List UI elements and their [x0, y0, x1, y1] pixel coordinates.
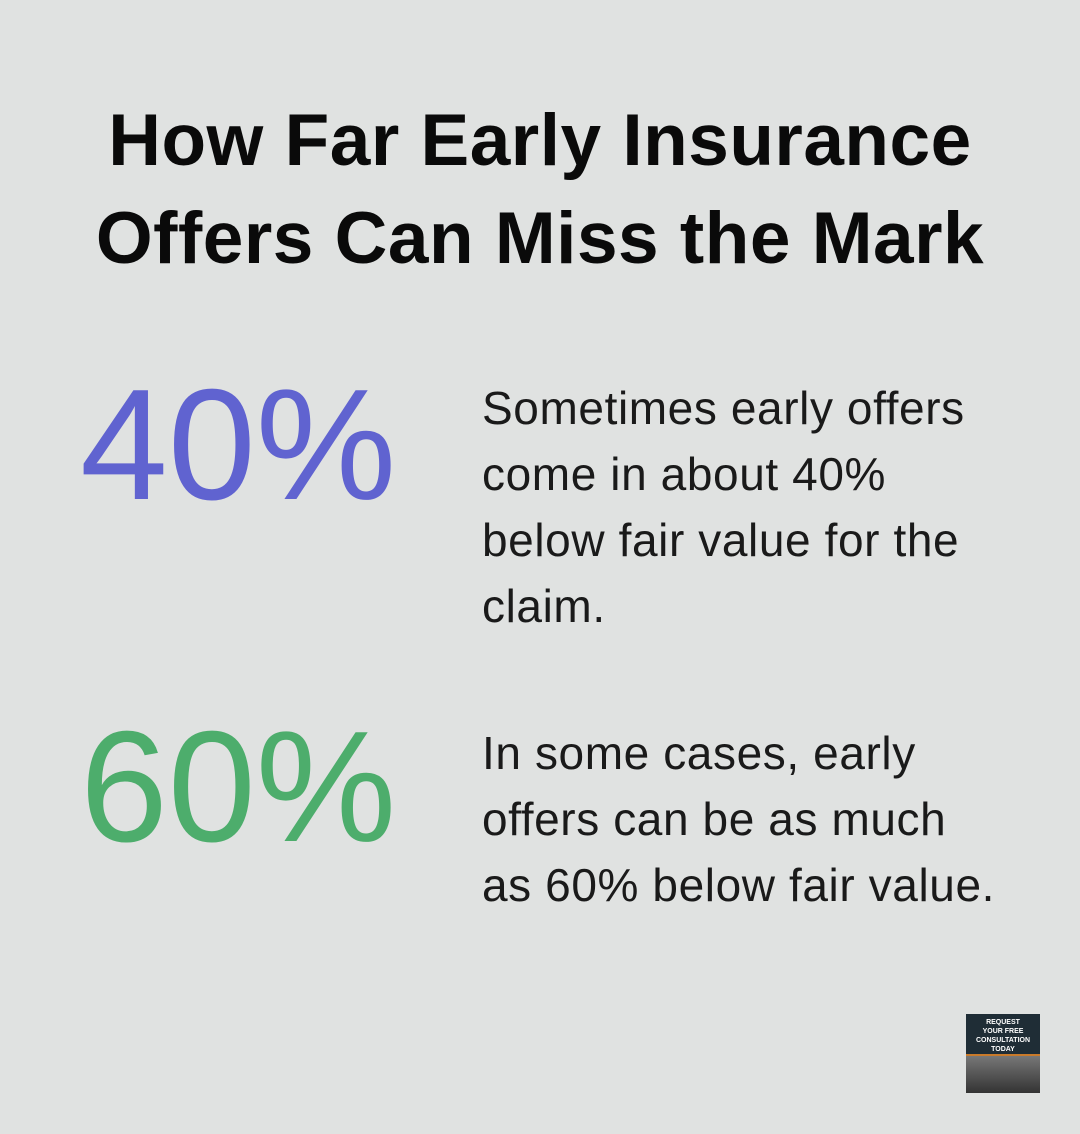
text: 40% description — [482, 382, 965, 632]
text: 60% description: In some cases, early — [482, 727, 916, 779]
text: 60% description — [482, 727, 995, 911]
logo: consultation badge — [966, 1014, 1040, 1093]
text: 60% description: offers can be as much — [482, 793, 946, 845]
logo: consultation badge: TODAY — [991, 1046, 1015, 1053]
stat: 60%: 60% — [80, 699, 396, 875]
stat: 40%: 40% — [80, 357, 396, 533]
logo: consultation badge: CONSULTATION — [976, 1037, 1030, 1044]
text: 40% description: come in about 40% — [482, 448, 886, 500]
title: Offers Can Miss the Mark — [96, 198, 984, 279]
logo: consultation badge: YOUR FREE — [983, 1028, 1023, 1035]
logo: consultation badge: REQUEST — [986, 1019, 1020, 1026]
title: How Far Early Insurance — [108, 100, 972, 181]
text: 40% description: below fair value for the — [482, 514, 959, 566]
title — [96, 100, 984, 279]
text: 60% description: as 60% below fair value. — [482, 859, 995, 911]
text: 40% description: Sometimes early offers — [482, 382, 965, 434]
text: 40% description: claim. — [482, 580, 606, 632]
